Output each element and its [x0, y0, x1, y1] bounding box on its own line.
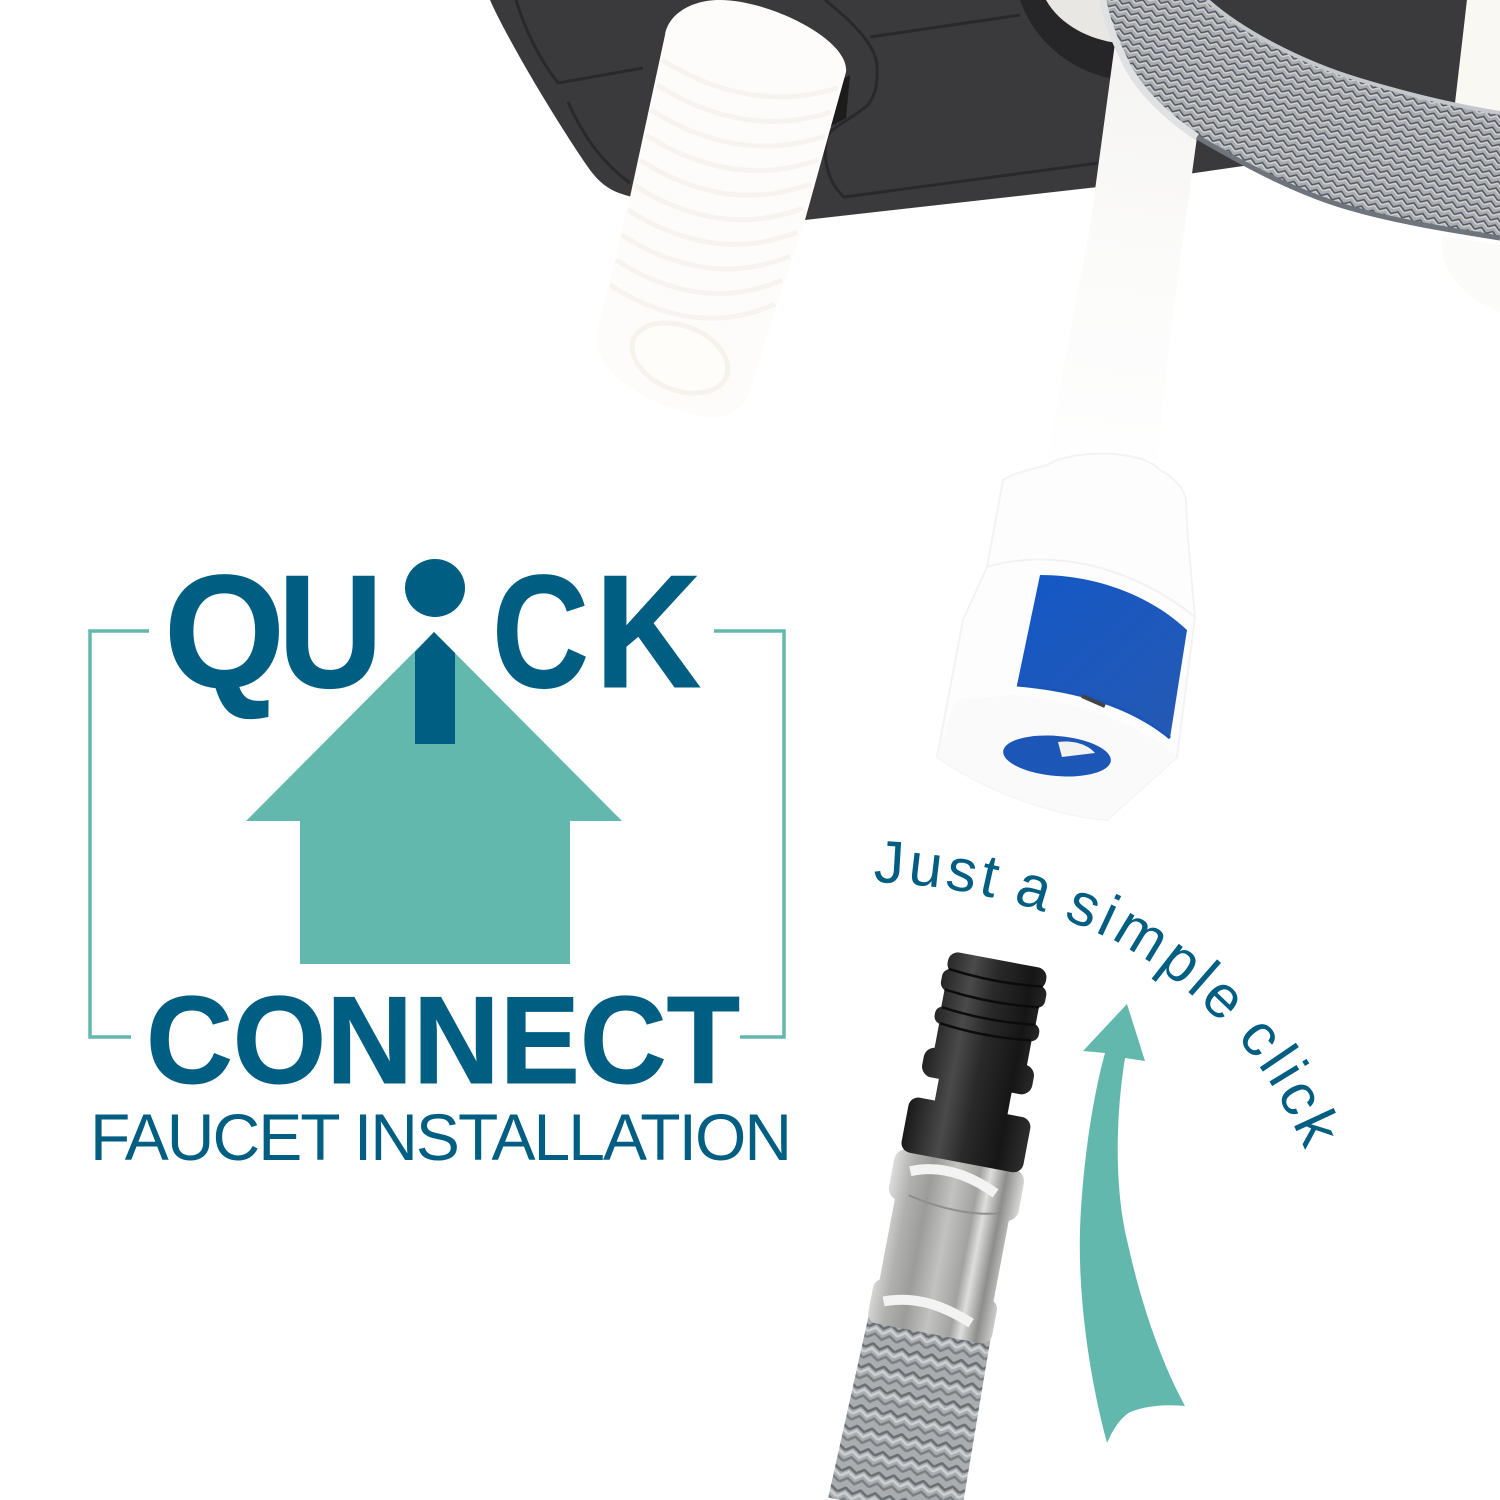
- dark ring around second hole: [1020, 0, 1140, 80]
- heading Quick: C: [492, 542, 589, 722]
- house icon: [246, 632, 622, 964]
- subheading: FAUCET INSTALLATION: [90, 1100, 792, 1174]
- bracket right: [714, 631, 784, 1037]
- letter i stem: [415, 632, 455, 744]
- thread lines: [610, 60, 838, 318]
- heading Quick: U: [278, 542, 383, 722]
- hose socket collar: [1046, 0, 1118, 43]
- fitting bottom face: [937, 695, 1177, 820]
- heading Quick: Q: [164, 542, 285, 722]
- white blob below hose: [1442, 236, 1500, 312]
- curved caption: Just a simple click: [874, 841, 1336, 1150]
- black quick-connect tip: [900, 948, 1060, 1174]
- heading Quick: [164, 542, 701, 722]
- tube shadow where it meets plate: [815, 75, 850, 135]
- metal highlights: [909, 1164, 998, 1193]
- blue clip: [1017, 575, 1187, 738]
- photo: faucet mounting plate with supply tubes: [490, 0, 1500, 460]
- heading Connect: CONNECT: [146, 972, 740, 1110]
- plate relief lines: [516, 0, 1098, 197]
- cream tube at right edge: [1455, 0, 1500, 125]
- braided hose: [828, 1313, 995, 1500]
- photo: quick-connect white fitting with blue clip: [937, 454, 1195, 820]
- fitting opening: [1001, 731, 1113, 781]
- braided hose top: [1103, 0, 1500, 238]
- mounting plate: [490, 0, 1467, 220]
- arrow: [1080, 1004, 1185, 1443]
- bracket left: [90, 631, 149, 1037]
- metal crimp sleeve: [864, 1147, 1026, 1346]
- photo: braided hose with black connector: [828, 947, 1064, 1500]
- tube tip opening: [622, 310, 738, 406]
- logo: Quick Connect: [90, 542, 792, 1174]
- heading Quick: K: [595, 542, 701, 722]
- fitting body: [937, 454, 1195, 820]
- grooves: [938, 969, 1043, 1044]
- threaded white tube: [597, 0, 846, 417]
- thin white tube: [1048, 43, 1197, 460]
- letter i dot: [405, 559, 465, 617]
